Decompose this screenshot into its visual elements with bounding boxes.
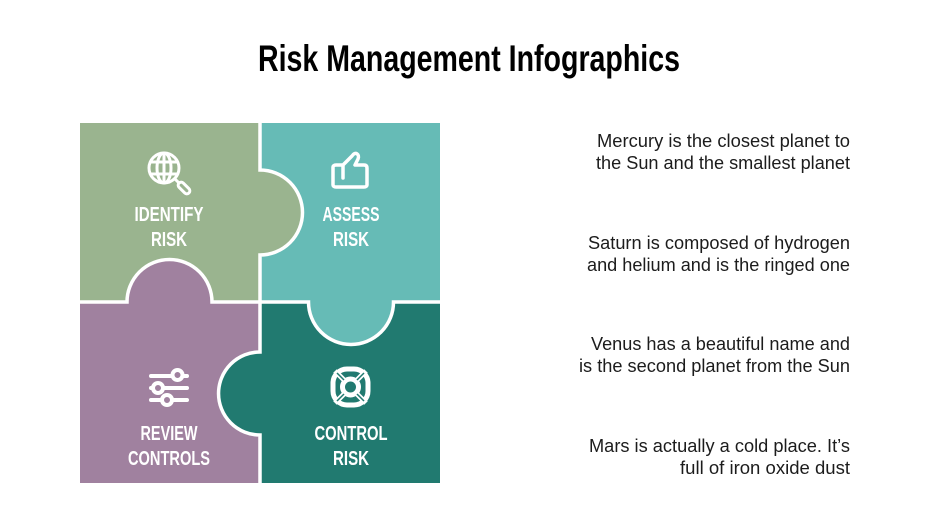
icon: thumbs up [333, 153, 367, 187]
icon: globe with magnifier [149, 153, 191, 195]
text block: venus: Venus has a beautiful name and [591, 334, 850, 354]
text block: mars: full of iron oxide dust [680, 458, 850, 478]
label: assess risk: ASSESS [322, 204, 380, 226]
label: control risk: RISK [333, 448, 369, 470]
text block: mercury: Mercury is the closest planet to [597, 131, 850, 151]
label: assess risk: RISK [333, 229, 369, 251]
label: identify risk: IDENTIFY [134, 204, 204, 226]
text block: saturn: and helium and is the ringed one [587, 255, 850, 275]
puzzle seams [80, 123, 440, 483]
icon: lifebuoy [333, 369, 368, 405]
text block: mars: Mars is actually a cold place. It’s [589, 436, 850, 456]
puzzle diagram [80, 123, 440, 483]
panel: control risk [219, 302, 440, 483]
label: review controls: REVIEW [140, 423, 198, 445]
panel: identify risk [80, 123, 302, 302]
label: control risk: CONTROL [314, 423, 388, 445]
text block: saturn: Saturn is composed of hydrogen [588, 233, 850, 253]
title: Risk Management Infographics [258, 38, 680, 79]
label: review controls: CONTROLS [128, 448, 210, 470]
label: identify risk: RISK [151, 229, 187, 251]
icon: sliders [151, 370, 187, 405]
text block: mercury: the Sun and the smallest planet [596, 153, 850, 173]
text block: venus: is the second planet from the Sun [579, 356, 850, 376]
panel: assess risk [260, 123, 440, 344]
panel: review controls [80, 260, 260, 483]
